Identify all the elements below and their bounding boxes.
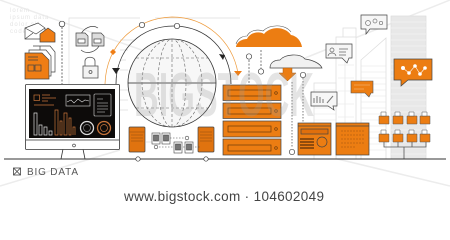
heading: BIG DATA xyxy=(27,167,78,178)
dashboard: line chart xyxy=(66,95,90,106)
monitor xyxy=(26,84,120,159)
speech bubble: chart xyxy=(311,92,337,110)
padlock icon xyxy=(83,57,98,78)
background frame lines xyxy=(69,18,240,142)
globe xyxy=(128,39,216,127)
source line: www.bigstock.com · 104602049 xyxy=(123,189,324,204)
folder tree xyxy=(379,112,430,159)
orange cloud xyxy=(236,26,302,47)
arcs with arrowheads xyxy=(105,17,242,84)
dashed connectors xyxy=(289,72,306,155)
faint background text: dolor sit xyxy=(10,22,40,28)
dashboard: bars xyxy=(34,110,75,135)
connected small documents xyxy=(152,133,200,153)
envelope icons xyxy=(25,23,55,42)
orange document stack xyxy=(25,46,55,79)
speech bubble: settings xyxy=(361,15,387,34)
speech bubble: profile xyxy=(326,44,352,63)
faint background text: code xyxy=(10,29,27,35)
speech bubble: orange network xyxy=(394,59,432,86)
orange download arrow xyxy=(279,68,296,81)
document exchange icons xyxy=(76,26,104,52)
server rack xyxy=(223,85,281,155)
cloud connectors xyxy=(246,50,264,85)
orange data panel xyxy=(336,123,369,155)
dashboard: ring gauges xyxy=(80,122,110,134)
faint background text: lorem xyxy=(10,8,30,14)
node with dashed line xyxy=(59,21,65,84)
city buildings xyxy=(314,16,426,159)
baseline xyxy=(4,157,446,161)
grey cloud xyxy=(270,55,322,68)
faint background text xyxy=(10,8,49,35)
heading icon xyxy=(14,168,20,175)
orange tower servers xyxy=(129,127,214,152)
dashboard: legend square xyxy=(34,95,56,105)
speech bubble: small orange xyxy=(351,81,373,97)
faint background text: ipsum data xyxy=(10,15,49,21)
orange media panel xyxy=(298,123,331,155)
dashboard: text card xyxy=(94,94,111,116)
